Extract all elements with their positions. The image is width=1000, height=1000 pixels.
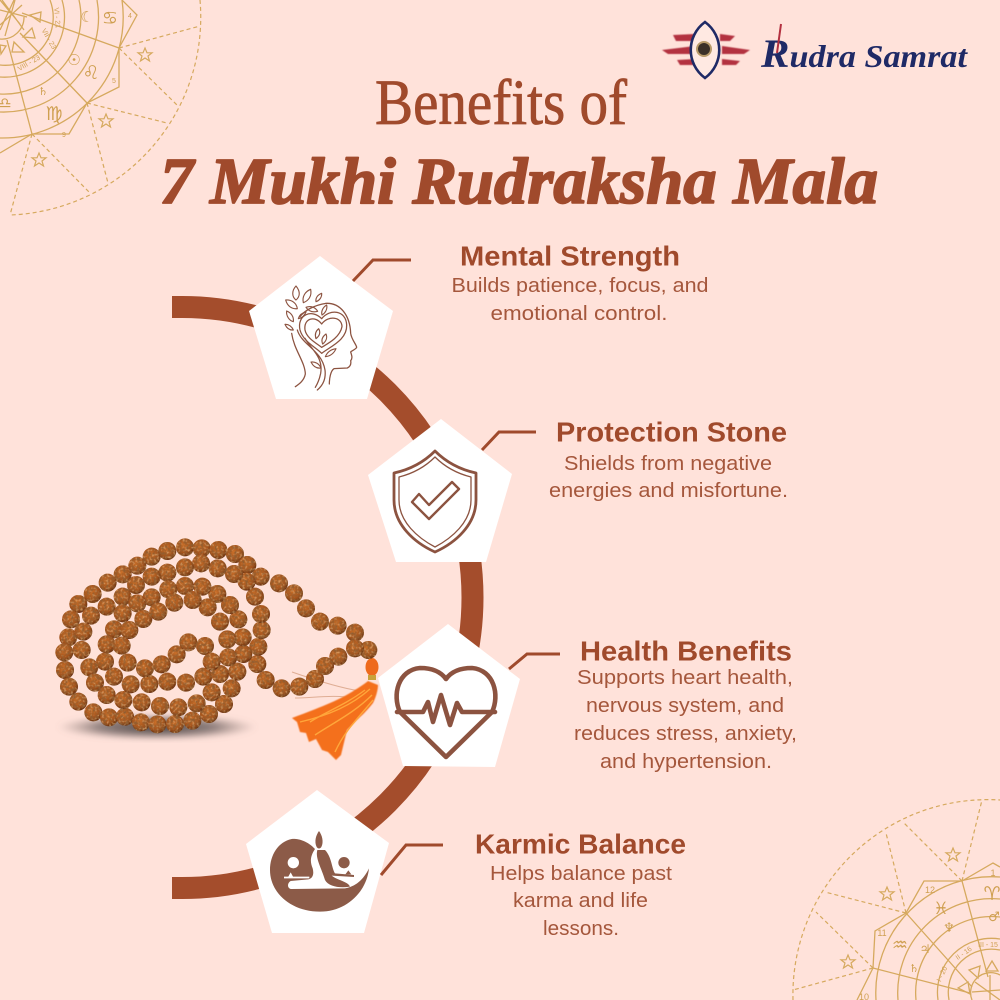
leader line 1: [353, 260, 411, 281]
zodiac wheel: bottom right: 11: [877, 928, 887, 938]
zodiac wheel: top left: ♄: [38, 85, 48, 98]
logo mark stroke: [777, 24, 781, 53]
icon: meditation yin yang: [270, 831, 369, 912]
zodiac wheel: top left: [0, 0, 201, 215]
logo: Rudra Samrat: [662, 22, 968, 78]
text: protection stone: energies and misfortune.: [549, 480, 788, 502]
zodiac wheel: top left: ☉: [67, 51, 81, 69]
text: protection stone: Protection Stone: [556, 416, 787, 448]
timeline arc: [172, 307, 473, 888]
zodiac wheel: bottom right: III - 15: [978, 942, 998, 949]
leader line 3: [509, 654, 560, 669]
logo wordmark: Rudra Samrat: [760, 31, 968, 76]
text: karmic balance: lessons.: [543, 918, 619, 940]
text: karmic balance: [475, 828, 686, 940]
logo eye: [691, 22, 719, 78]
zodiac wheel: top left: ♍: [45, 103, 63, 125]
text: health benefits: reduces stress, anxiety,: [574, 723, 797, 745]
zodiac wheel: bottom right: ♓: [933, 899, 949, 919]
text: health benefits: Supports heart health,: [577, 667, 793, 689]
zodiac wheel: top left: 9: [62, 132, 66, 139]
panel: protection stone: [368, 416, 788, 562]
zodiac wheel: bottom right: II - 16: [955, 946, 974, 962]
pentagon 4: [246, 790, 389, 933]
text: health benefits: [574, 636, 797, 773]
text: mental strength: [452, 240, 708, 325]
icon: shield with check: [394, 451, 476, 552]
text: karmic balance: Karmic Balance: [475, 828, 686, 860]
logo medallion: [697, 42, 711, 56]
zodiac wheel: top left: 4: [128, 13, 132, 20]
zodiac wheel: bottom right: 1: [990, 868, 996, 878]
pentagon 1: [249, 256, 393, 399]
text: protection stone: [549, 416, 788, 502]
logo stripes: [662, 34, 750, 65]
title line 2: 7 Mukhi Rudraksha Mala: [160, 145, 878, 218]
panel: karmic balance: [246, 790, 686, 940]
zodiac wheel: bottom right: ♄: [909, 962, 919, 975]
zodiac wheel: top left: 5: [112, 78, 116, 85]
pentagon 2: [368, 419, 512, 562]
mala shadow: [57, 714, 257, 740]
icon: heart with pulse: [397, 668, 495, 757]
zodiac wheel: top left: ♌: [82, 62, 100, 84]
zodiac wheel: bottom right: ♒: [892, 935, 908, 956]
zodiac wheel: top left: ☾: [80, 8, 94, 26]
zodiac wheel: top left: ♋: [102, 8, 118, 29]
text: health benefits: and hypertension.: [600, 751, 772, 773]
panel: health benefits: [378, 624, 797, 773]
title line 1: Benefits of: [375, 67, 627, 139]
pentagon 3: [378, 624, 520, 767]
zodiac wheel: top left: VII - 23: [40, 28, 57, 51]
zodiac wheel: bottom right: ♆: [943, 921, 955, 936]
panel: mental strength: [249, 240, 708, 399]
mala tassel: [292, 658, 378, 760]
zodiac wheel: bottom right: ♃: [920, 942, 930, 956]
text: mental strength: Mental Strength: [460, 240, 680, 272]
mala illustration: [55, 538, 378, 760]
title: [160, 67, 878, 218]
text: health benefits: nervous system, and: [586, 695, 784, 717]
icon: head with heart and leaves: [285, 286, 357, 390]
text: mental strength: Builds patience, focus, and: [452, 275, 708, 297]
zodiac wheel: bottom right: 12: [925, 885, 935, 895]
text: karmic balance: karma and life: [513, 890, 648, 912]
text: karmic balance: Helps balance past: [490, 863, 672, 885]
zodiac wheel: bottom right: I - 20: [936, 966, 949, 983]
leader line 4: [381, 845, 443, 875]
zodiac wheel: top left: VIII - 23: [17, 54, 42, 73]
text: mental strength: emotional control.: [490, 303, 668, 325]
text: health benefits: Health Benefits: [580, 636, 792, 666]
mala beads: [55, 538, 377, 733]
zodiac wheel: bottom right: [793, 800, 1000, 1000]
zodiac wheel: top left: VI - 21: [52, 7, 61, 29]
zodiac wheel: bottom right: ♂: [988, 910, 1000, 925]
text: protection stone: Shields from negative: [564, 453, 772, 475]
leader line 2: [482, 432, 536, 450]
